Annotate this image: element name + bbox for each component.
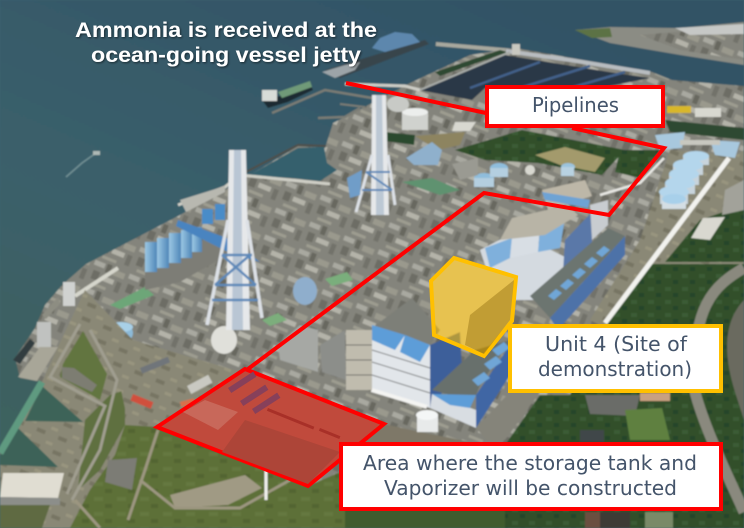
jetty conveyors on the coast bbox=[75, 175, 330, 296]
far-east plots and greenery bbox=[652, 150, 744, 264]
far island bbox=[575, 22, 744, 65]
curved road bbox=[694, 268, 744, 512]
mid plant buildings bbox=[402, 122, 478, 195]
stacked materials in area bbox=[183, 372, 340, 484]
vessel jetties bbox=[272, 90, 372, 118]
wastewater building bbox=[0, 473, 64, 528]
north-east industrial strip bbox=[665, 106, 744, 140]
southern grassland bbox=[70, 425, 345, 528]
western grass belt bbox=[78, 390, 125, 490]
mid-left plant blocks bbox=[109, 272, 353, 354]
callout: Unit 4: Unit 4 (Site of bbox=[545, 332, 688, 356]
south roads bbox=[75, 430, 290, 528]
callout: storage tank and vaporizer area: Vaporizer will be constructed bbox=[384, 476, 677, 500]
long turbine hall bbox=[530, 228, 625, 330]
gas plant blocks beside boiler bbox=[278, 325, 372, 390]
coal silos bbox=[145, 204, 260, 290]
short white pipe bbox=[600, 158, 664, 195]
western green field bbox=[60, 331, 107, 400]
upper jetty with cranes bbox=[322, 32, 516, 78]
light block under Unit 4 bbox=[431, 258, 516, 356]
small boat with wake bbox=[66, 151, 100, 177]
chimney left bbox=[207, 150, 262, 330]
western yard bbox=[0, 290, 157, 528]
south strip below area callout bbox=[345, 505, 505, 528]
gravel yard bbox=[170, 475, 262, 508]
small white tank bbox=[416, 410, 438, 432]
moored ammonia vessel bbox=[262, 81, 313, 108]
car park and garden bbox=[580, 393, 673, 528]
coal yard bbox=[345, 44, 650, 100]
storage tank and vaporizer area bbox=[157, 369, 384, 486]
chimney right bbox=[347, 95, 395, 215]
callout: Unit 4: demonstration) bbox=[538, 357, 692, 381]
callout: Unit 4 bbox=[510, 326, 721, 391]
wind turbine bbox=[258, 458, 280, 500]
title: ocean-going vessel jetty bbox=[91, 44, 361, 67]
callout: pipelines: Pipelines bbox=[532, 93, 619, 117]
quay wall bbox=[246, 145, 326, 172]
long white pipeline bbox=[605, 158, 729, 323]
pale blue plant at pipe end bbox=[655, 132, 740, 158]
main boiler building (foreground) bbox=[371, 298, 462, 409]
parked stacks bbox=[130, 357, 212, 409]
small tree belt and lawn bbox=[385, 132, 465, 150]
coastal pier, docks and ponds bbox=[0, 282, 83, 467]
lower annex hall bbox=[430, 340, 512, 428]
title bbox=[75, 19, 377, 67]
Unit 4 highlight bbox=[431, 258, 516, 356]
pipeline route bbox=[248, 83, 664, 369]
right-edge embankment bbox=[727, 300, 744, 420]
upper boiler block bbox=[480, 180, 608, 300]
gray pad in field bbox=[62, 367, 97, 392]
callout: pipelines bbox=[487, 87, 663, 126]
grounds near tanks bbox=[590, 150, 735, 330]
southwest gray pad bbox=[105, 458, 137, 490]
callout: storage tank and vaporizer area bbox=[341, 444, 721, 509]
Unit 4 shaded side bbox=[465, 280, 514, 354]
central lawn bbox=[535, 147, 605, 172]
callout: storage tank and vaporizer area: Area where the storage tank and bbox=[363, 451, 697, 475]
tank farm bbox=[659, 151, 709, 209]
gas holders and small tanks bbox=[387, 96, 575, 187]
right forest bbox=[615, 150, 660, 178]
ground around boiler and road bbox=[476, 392, 540, 444]
southeast woodland bbox=[500, 264, 744, 528]
harbour basin bbox=[248, 147, 337, 181]
central forest bbox=[455, 130, 625, 175]
construction lot bbox=[120, 340, 247, 425]
title: Ammonia is received at the bbox=[75, 19, 377, 42]
western perimeter roads bbox=[50, 324, 117, 500]
